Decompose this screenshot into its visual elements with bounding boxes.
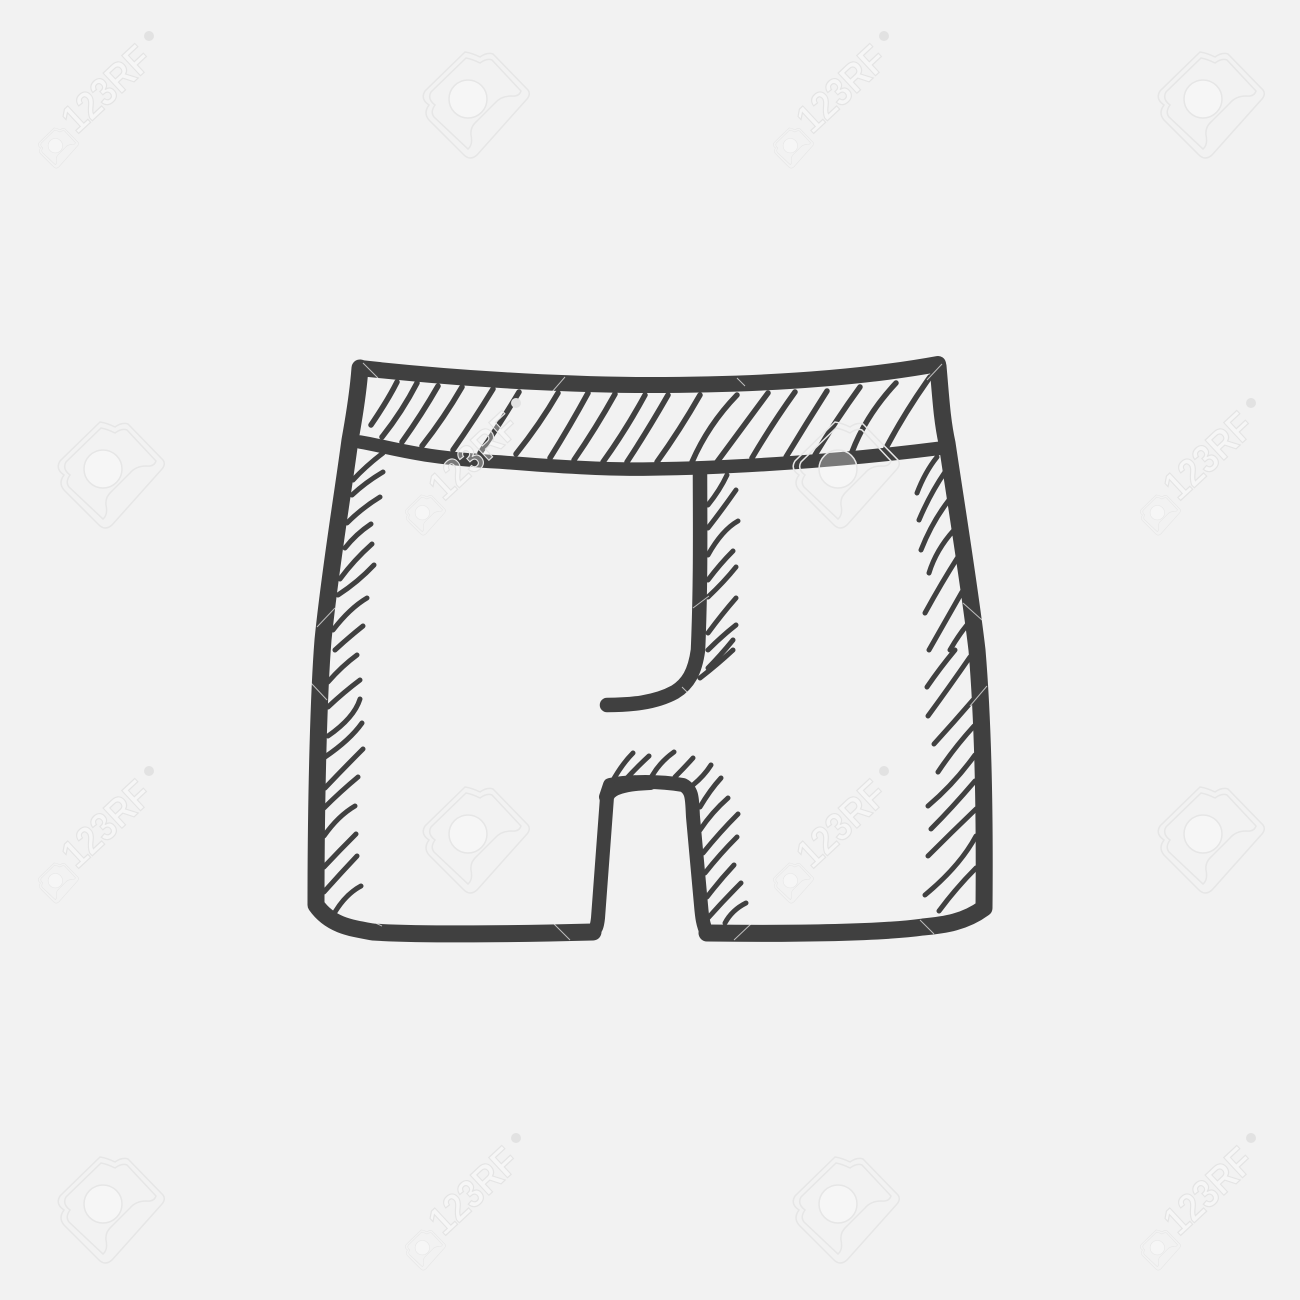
right side hatching xyxy=(917,457,976,911)
left leg inner edge xyxy=(593,783,650,932)
waistband hatching xyxy=(371,377,930,462)
right leg outer edge and hem xyxy=(707,366,984,933)
watermark text: 123RF xyxy=(1155,404,1263,509)
watermark text: 123RF xyxy=(788,37,896,142)
watermark text: 123RF xyxy=(53,772,161,877)
right leg inner edge xyxy=(606,782,707,933)
watermark text: 123RF xyxy=(420,1139,528,1244)
watermark text: 123RF xyxy=(1155,1139,1263,1244)
left side hatching xyxy=(324,453,383,912)
left leg outer edge and hem xyxy=(316,368,593,934)
watermark registered marks xyxy=(144,31,1256,1143)
fly seam xyxy=(607,470,700,705)
watermark text: 123RF xyxy=(788,772,896,877)
waistband bottom edge xyxy=(360,442,942,469)
watermark text: 123RF xyxy=(420,404,528,509)
faint seam lines crossing the strokes xyxy=(311,363,987,940)
fly hatching xyxy=(700,475,738,678)
watermark text: 123RF xyxy=(53,37,161,142)
watermark logo icons xyxy=(38,128,1181,1270)
crotch hatching xyxy=(612,752,746,923)
waistband top edge xyxy=(360,364,938,385)
shorts drawing xyxy=(316,364,984,934)
